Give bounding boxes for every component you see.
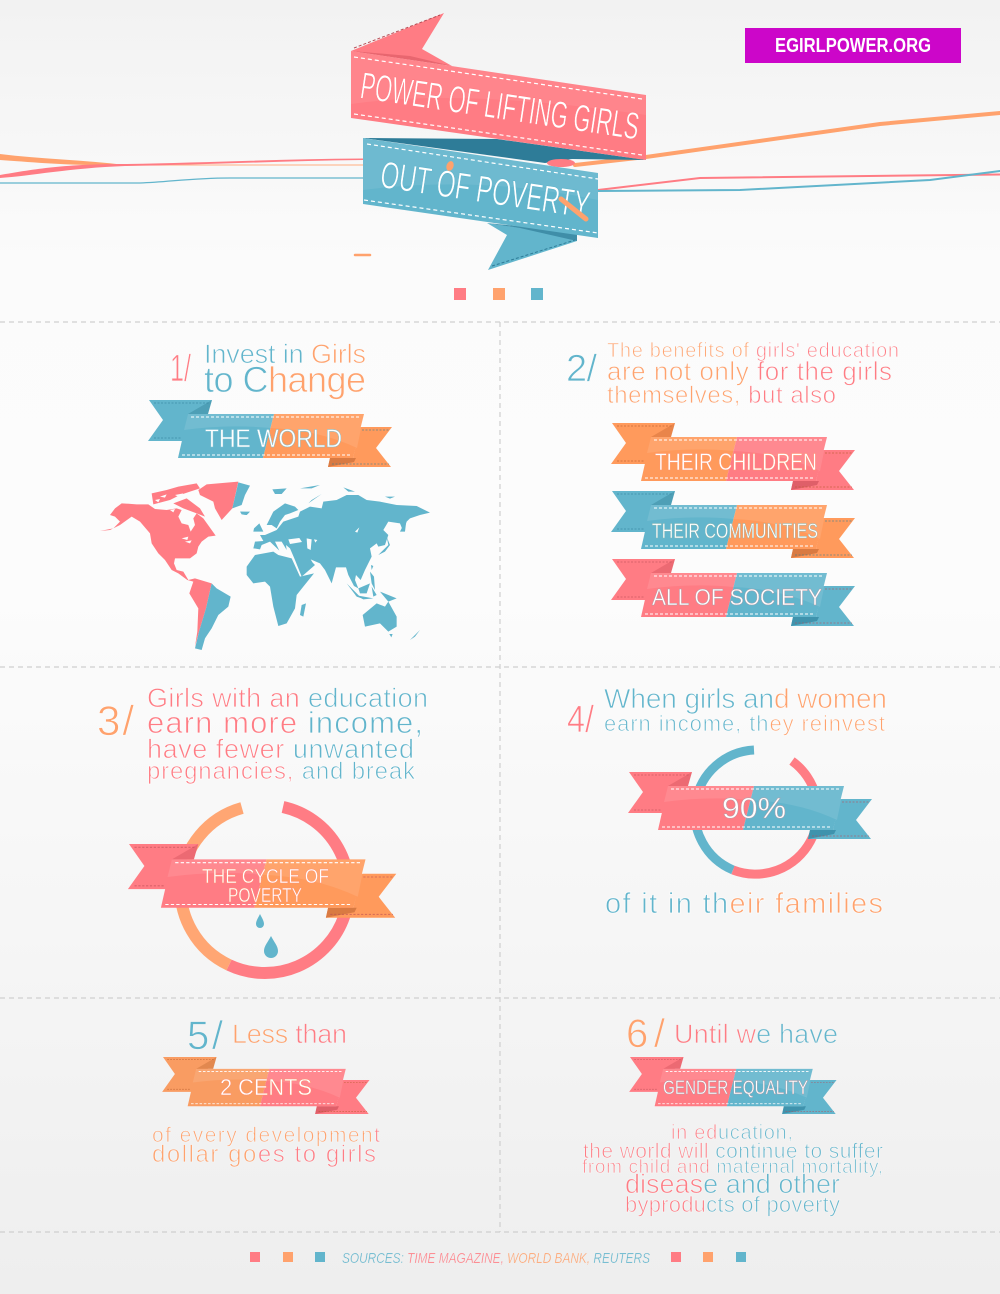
body text: the world will continue to suffer: [583, 1140, 883, 1163]
ribbon: the cycle of poverty: [128, 844, 396, 918]
ribbon: 90 percent: [628, 772, 872, 839]
site badge: EGIRLPOWER.ORG: [775, 35, 931, 57]
number 5: 5/: [187, 1014, 224, 1058]
left squares: [250, 1252, 325, 1262]
body text: [582, 1122, 883, 1217]
heading: When girls and women: [604, 683, 887, 714]
heading: The benefits of girls' education: [607, 340, 899, 362]
heading: [607, 340, 899, 409]
heading: to Change: [204, 359, 366, 400]
title ribbons: [351, 13, 646, 270]
panel 5: less than 2 cents: [152, 1014, 380, 1168]
decorative streamers behind the title: [0, 113, 1000, 191]
heading: Until we have: [674, 1019, 838, 1049]
heading: [147, 683, 428, 785]
heading: Less than: [232, 1019, 347, 1049]
ribbon: gender equality: GENDER EQUALITY: [663, 1078, 808, 1099]
body text: from child and maternal mortality,: [582, 1157, 883, 1178]
ribbon: the world: [148, 400, 392, 467]
number 1: 1/: [170, 348, 191, 390]
body text: disease and other: [625, 1169, 840, 1199]
body text: in education,: [671, 1122, 793, 1144]
ribbon: out of poverty: OUT OF POVERTY: [378, 154, 593, 227]
icon: water drops: [256, 914, 278, 958]
heading: Girls with an education: [147, 683, 428, 713]
heading: earn income, they reinvest: [604, 711, 885, 736]
body text: byproducts of poverty: [625, 1192, 840, 1217]
panel 1: invest in girls: [100, 339, 430, 650]
ribbon: their communities: [611, 491, 855, 558]
site badge: [745, 28, 961, 63]
right squares: [671, 1252, 746, 1262]
ribbon: the cycle of poverty: THE CYCLE OF: [202, 866, 329, 888]
body text: [152, 1124, 380, 1168]
heading: earn more income,: [147, 705, 423, 740]
ring chart: [695, 750, 818, 874]
ribbon: their children: [611, 423, 855, 490]
number 2: 2/: [566, 348, 597, 390]
ribbon: 2 cents: [162, 1057, 370, 1114]
header squares: [454, 288, 543, 300]
ribbon: power of lifting girls: [351, 13, 646, 167]
ribbon: power of lifting girls: POWER OF LIFTING GIRLS: [358, 65, 642, 148]
number 6: 6/: [626, 1012, 666, 1056]
world map: [100, 482, 430, 650]
sources text: SOURCES: TIME MAGAZINE, WORLD BANK, REUTERS: [342, 1250, 650, 1267]
ribbon: the cycle of poverty: POVERTY: [228, 885, 302, 907]
heading: are not only for the girls: [607, 356, 892, 386]
americas: [100, 482, 250, 650]
ribbon: 90 percent: 90%: [722, 793, 786, 825]
heading: pregnancies, and break: [147, 758, 416, 785]
ribbon: their communities: THEIR COMMUNITIES: [652, 520, 818, 543]
panel 6: until gender equality: [582, 1012, 883, 1217]
heading: [604, 683, 887, 736]
number 3: 3/: [97, 697, 134, 744]
ribbon: gender equality: [629, 1057, 837, 1114]
grid dividers: [0, 322, 1000, 1232]
cycle ring: [181, 807, 349, 973]
heading: themselves, but also: [607, 382, 836, 409]
body text: dollar goes to girls: [152, 1141, 376, 1168]
heading: [204, 339, 366, 400]
heading: Invest in Girls: [204, 339, 366, 369]
heading: have fewer unwanted: [147, 734, 414, 764]
footer sources: [250, 1250, 746, 1267]
ribbon: all of society: [611, 559, 855, 626]
ribbon: 2 cents: 2 CENTS: [220, 1074, 312, 1100]
panel 3: the cycle of poverty: [97, 683, 428, 973]
ribbon: all of society: ALL OF SOCIETY: [652, 584, 822, 610]
ribbon: their children: THEIR CHILDREN: [655, 449, 817, 476]
panel 4: reinvest 90 percent: [567, 683, 887, 920]
eurasia, africa, oceania: [240, 485, 430, 640]
ribbon: the world: THE WORLD: [205, 425, 342, 453]
number 4: 4/: [567, 699, 594, 741]
closing line: of it in their families: [605, 888, 883, 920]
ribbon: out of poverty: [363, 138, 598, 270]
panel 2: benefits of education: [566, 340, 899, 626]
body text: of every development: [152, 1124, 380, 1147]
